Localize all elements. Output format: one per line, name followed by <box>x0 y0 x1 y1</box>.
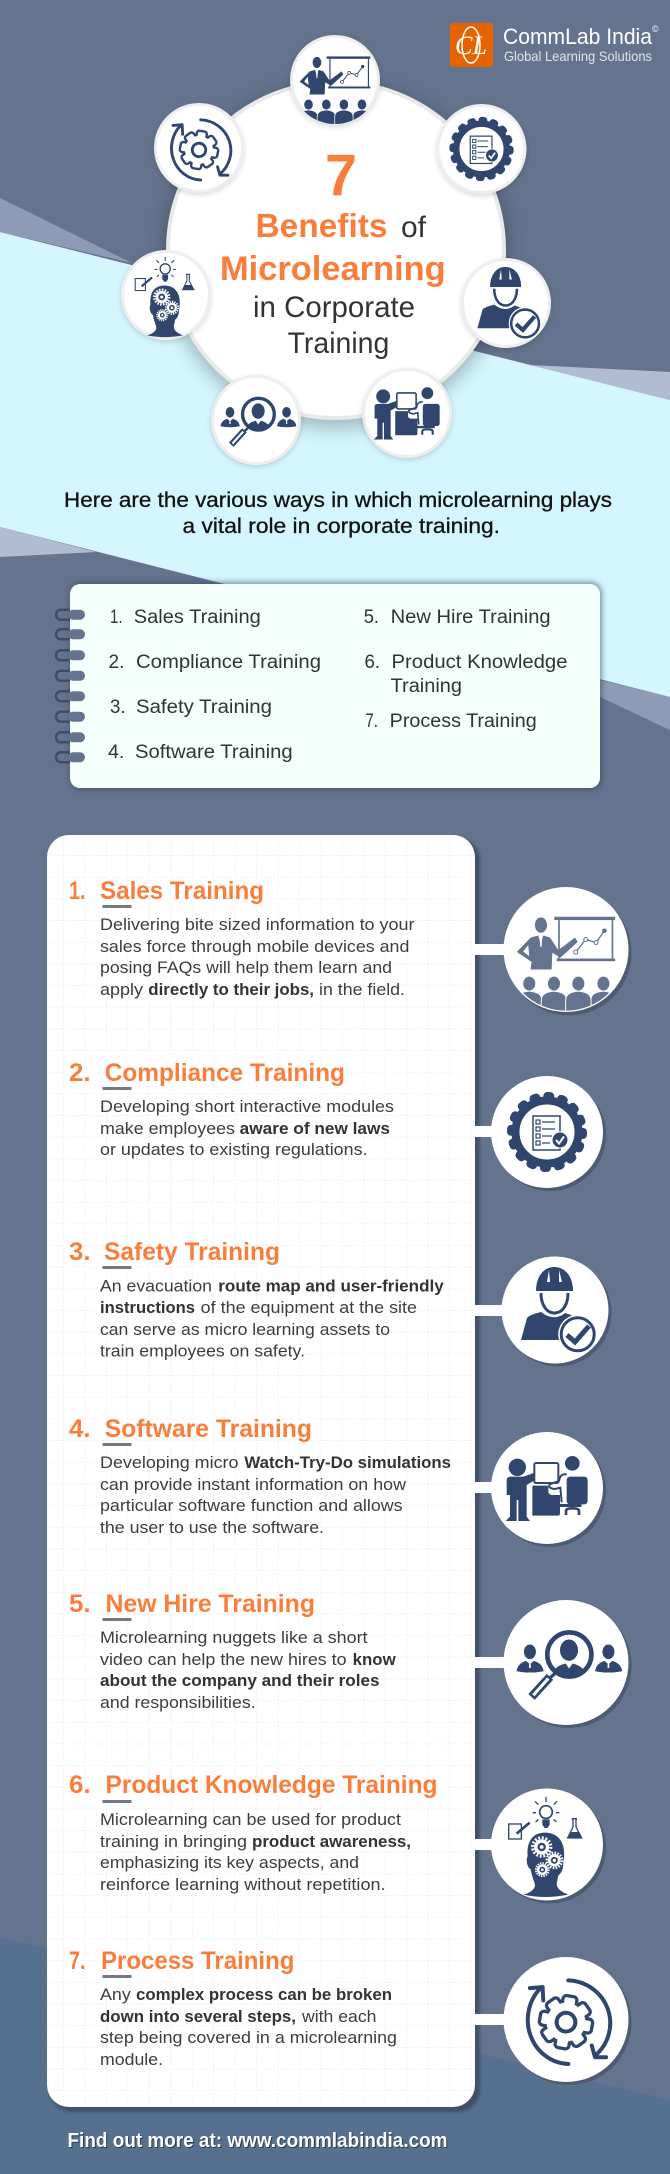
notebook spiral rings <box>56 610 85 762</box>
hero icon: product knowledge training <box>121 252 211 342</box>
hero icon: compliance training <box>436 106 526 196</box>
title: of <box>401 211 427 244</box>
list column 1: 4. <box>108 742 124 763</box>
item 7: process training <box>69 1947 397 2069</box>
icon: process gear cycle <box>475 1957 632 2085</box>
footer: Find out more at: www.commlabindia.com <box>68 2130 448 2152</box>
item 3: safety training: 3. <box>69 1238 91 1266</box>
list column 2: New Hire Training <box>391 607 551 628</box>
item 4: software training: can provide instant information on how <box>100 1475 407 1494</box>
item 3: safety training: An evacuation <box>100 1276 212 1296</box>
item 4: software training <box>69 1415 451 1537</box>
item 7: process training: with each <box>301 2007 376 2026</box>
item 7: process training: complex process can be broken <box>136 1985 392 2004</box>
item 2: compliance training: make employees <box>100 1119 235 1138</box>
list column 1: 2. <box>108 652 124 673</box>
panel: benefits card <box>47 835 480 2112</box>
item 3: safety training: route map and user-friendly <box>218 1276 444 1296</box>
logo <box>450 23 659 67</box>
hero icon: new hire training <box>211 376 301 467</box>
icon: safety worker <box>475 1256 612 1366</box>
logo: © <box>652 24 659 34</box>
item 3: safety training: Safety Training <box>104 1238 280 1266</box>
hero icon: process training <box>154 104 244 195</box>
list column 2: 7. <box>365 711 378 732</box>
list column 1: Software Training <box>135 742 293 763</box>
icon: product knowledge head <box>475 1788 606 1904</box>
item 7: process training: Any <box>100 1985 131 2004</box>
item 7: process training: step being covered in a microlearning <box>100 2028 397 2047</box>
item 1: sales training: Sales Training <box>100 877 264 905</box>
item 4: software training: particular software function and allows <box>100 1496 403 1515</box>
icon: new hire magnifier <box>475 1600 632 1728</box>
item 4: software training: 4. <box>69 1415 91 1443</box>
item 5: new hire training <box>69 1590 396 1712</box>
list column 1: Compliance Training <box>136 652 321 673</box>
item 4: software training: Developing micro <box>100 1453 238 1472</box>
item 6: product knowledge training: Product Knowledge Training <box>106 1771 438 1799</box>
item 1: sales training: in the field. <box>319 980 405 999</box>
title: Training <box>288 327 389 360</box>
hero icon: software training <box>362 370 452 460</box>
title: 7 <box>325 143 357 208</box>
logo: Global Learning Solutions <box>504 48 652 64</box>
list column 2: 6. <box>364 652 380 673</box>
item 2: compliance training: Developing short interactive modules <box>100 1097 394 1116</box>
item 1: sales training: Delivering bite sized information to your <box>100 915 415 934</box>
list column 2 <box>364 607 568 732</box>
item 1: sales training: sales force through mobile devices and <box>100 937 409 956</box>
logo: CommLab India <box>503 24 653 49</box>
item 3: safety training: can serve as micro learning assets to <box>100 1320 390 1339</box>
item 2: compliance training <box>69 1059 394 1159</box>
item 1: sales training: posing FAQs will help them learn and <box>100 958 392 977</box>
list column 1: 3. <box>110 697 126 718</box>
intro text: a vital role in corporate training. <box>182 515 500 538</box>
logo: CL <box>455 31 487 60</box>
item 6: product knowledge training: product awareness, <box>252 1832 411 1851</box>
hero icon: sales training <box>290 36 380 127</box>
item 5: new hire training: New Hire Training <box>106 1590 315 1618</box>
item 6: product knowledge training: emphasizing its key aspects, and <box>100 1853 359 1872</box>
list column 1 <box>108 607 321 763</box>
item 6: product knowledge training: reinforce learning without repetition. <box>100 1875 386 1894</box>
item 6: product knowledge training: training in bringing <box>100 1832 247 1851</box>
list column 1: Safety Training <box>136 697 272 718</box>
item 5: new hire training: and responsibilities. <box>100 1693 256 1712</box>
icon: compliance gear checklist <box>475 1076 606 1191</box>
item 3: safety training: instructions <box>100 1298 195 1317</box>
item 7: process training: module. <box>100 2050 163 2069</box>
item 4: software training: Software Training <box>105 1415 312 1443</box>
item 1: sales training <box>69 877 415 999</box>
list column 1: 1. <box>110 607 123 628</box>
item 5: new hire training: know <box>353 1650 396 1669</box>
item 4: software training: Watch-Try-Do simulations <box>244 1453 451 1472</box>
list column 2: 5. <box>364 607 379 628</box>
list column 1: Sales Training <box>134 607 261 628</box>
item 5: new hire training: video can help the new hires to <box>100 1650 347 1669</box>
item 7: process training: 7. <box>69 1947 86 1975</box>
list column 2: Training <box>391 676 462 697</box>
item 1: sales training: apply <box>100 980 144 999</box>
item 6: product knowledge training: 6. <box>69 1771 91 1799</box>
item 5: new hire training: 5. <box>69 1590 91 1618</box>
item 3: safety training <box>69 1238 444 1360</box>
hero icon: safety training <box>461 260 551 350</box>
item 2: compliance training: or updates to existing regulations. <box>100 1140 368 1159</box>
item 6: product knowledge training <box>69 1771 438 1894</box>
title: Microlearning <box>220 250 446 288</box>
hero circle with title <box>164 82 508 428</box>
intro text: Here are the various ways in which microlearning plays <box>64 489 612 512</box>
item 2: compliance training: 2. <box>69 1059 91 1087</box>
item 6: product knowledge training: Microlearning can be used for product <box>100 1810 401 1829</box>
title <box>220 143 446 360</box>
icon: sales training presenter <box>475 887 632 1016</box>
title: in Corporate <box>253 291 415 324</box>
item 7: process training: Process Training <box>101 1947 294 1975</box>
item 2: compliance training: Compliance Training <box>105 1059 345 1087</box>
item 4: software training: the user to use the software. <box>100 1518 324 1537</box>
item 3: safety training: of the equipment at the site <box>201 1298 417 1317</box>
item 3: safety training: train employees on safety. <box>100 1342 305 1360</box>
item 5: new hire training: about the company and their roles <box>100 1671 380 1690</box>
icon: software team <box>475 1432 606 1547</box>
panel: notebook list <box>56 582 602 790</box>
item 7: process training: down into several steps, <box>100 2007 296 2026</box>
item 1: sales training: directly to their jobs, <box>148 980 314 999</box>
list column 2: Product Knowledge <box>392 652 568 673</box>
item 1: sales training: 1. <box>69 877 86 905</box>
list column 2: Process Training <box>390 711 537 732</box>
item 5: new hire training: Microlearning nuggets like a short <box>100 1628 368 1647</box>
item 2: compliance training: aware of new laws <box>240 1119 390 1138</box>
title: Benefits <box>256 207 388 244</box>
intro text <box>64 489 612 538</box>
